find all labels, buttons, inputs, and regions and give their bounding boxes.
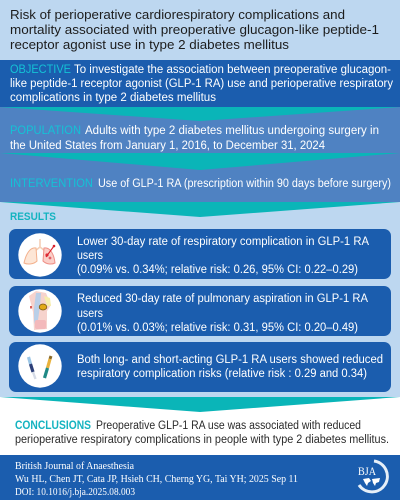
result card: respiratory complication [9, 229, 391, 279]
panel: objective: complications in type 2 diabetes mellitus [10, 92, 216, 104]
icon: airway [18, 289, 62, 333]
card text: users [77, 250, 103, 262]
citation: Wu HL, Chen JT, Cata JP, Hsieh CH, Cherng YG, Tai YH; 2025 Sep 11 [15, 474, 298, 485]
card text: Both long- and short-acting GLP-1 RA users showed reduced [77, 354, 383, 366]
result card: long and short acting [9, 342, 391, 392]
card text [77, 354, 383, 380]
panel: objective: OBJECTIVE [10, 64, 71, 76]
citation [15, 461, 298, 498]
title panel: mortality associated with preoperative glucagon-like peptide-1 [10, 22, 379, 37]
icon: lungs [18, 233, 62, 277]
card text: Reduced 30-day rate of pulmonary aspiration in GLP-1 RA [77, 293, 368, 305]
panel: objective: like peptide-1 receptor agonist (GLP-1 RA) use and perioperative respiratory [10, 78, 393, 90]
conclusions: Preoperative GLP-1 RA use was associated with reduced [96, 420, 361, 432]
panel: results [0, 202, 400, 397]
panel: population: Adults with type 2 diabetes mellitus undergoing surgery in [85, 125, 379, 137]
card text: respiratory complication risks (relative risk : 0.29 and 0.34) [77, 368, 367, 380]
card text: (0.09% vs. 0.34%; relative risk: 0.26, 95% CI: 0.22–0.29) [77, 264, 358, 276]
title panel: receptor agonist use in type 2 diabetes mellitus [10, 37, 290, 52]
footer [0, 455, 400, 500]
title panel [0, 0, 400, 60]
icon: injection pens [18, 344, 62, 388]
card text: Lower 30-day rate of respiratory complication in GLP-1 RA [77, 236, 369, 248]
conclusions: CONCLUSIONS [15, 420, 91, 432]
panel: objective: To investigate the association between preoperative glucagon- [74, 64, 391, 76]
panel: population: POPULATION [10, 125, 81, 137]
citation: British Journal of Anaesthesia [15, 461, 135, 472]
panel: objective [0, 60, 400, 107]
conclusions [15, 420, 389, 446]
results heading: RESULTS [10, 211, 56, 223]
panel: population [0, 107, 400, 153]
card text: users [77, 308, 103, 320]
logo: BJA [358, 461, 387, 492]
arrow: chevron to conclusions [0, 397, 400, 412]
result card: pulmonary aspiration [9, 286, 391, 336]
panel: intervention [0, 153, 400, 202]
logo: BJA: BJA [358, 464, 376, 478]
citation: DOI: 10.1016/j.bja.2025.08.003 [15, 487, 135, 498]
card text [77, 293, 368, 334]
title panel: Risk of perioperative cardiorespiratory complications and [10, 7, 345, 22]
panel: intervention: INTERVENTION [10, 178, 93, 190]
panel: population: the United States from January 1, 2016, to December 31, 2024 [10, 140, 326, 152]
card text: (0.01% vs. 0.03%; relative risk: 0.31, 95% CI: 0.20–0.49) [77, 322, 358, 334]
card text [77, 236, 369, 276]
